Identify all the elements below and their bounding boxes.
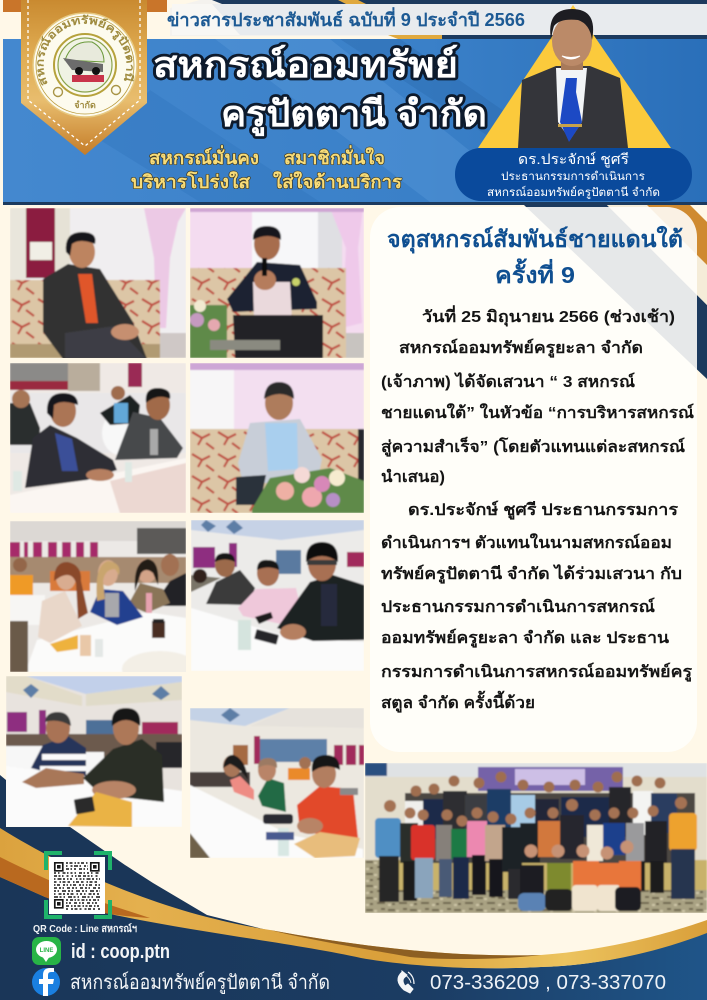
icon: phone — [398, 971, 414, 993]
photo: two men at table — [10, 363, 186, 513]
icon: facebook — [32, 968, 60, 996]
article body: สหกรณ์ออมทรัพย์ครูยะลา จำกัด — [399, 338, 643, 359]
logo: cooperative seal: จำกัด — [74, 100, 96, 110]
president name plate: ดร.ประจักษ์ ชูศรี — [518, 151, 630, 168]
line id: id : coop.ptn — [71, 941, 170, 963]
article body: (เจ้าภาพ) ได้จัดเสวนา “ 3 สหกรณ์ — [381, 372, 635, 391]
article body: ชายแดนใต้” ในหัวข้อ “การบริหารสหกรณ์ — [381, 403, 694, 422]
article heading: จตุสหกรณ์สัมพันธ์ชายแดนใต้ — [387, 225, 683, 254]
title: ครูปัตตานี จำกัด — [221, 93, 487, 137]
QR code — [46, 853, 110, 917]
photo: two men in front of hall — [6, 676, 182, 827]
photo: speaker with microphone — [190, 208, 364, 358]
left diagonal accent — [0, 775, 275, 932]
icon: LINE: LINE — [40, 948, 53, 954]
president name plate: ประธานกรรมการดำเนินการ — [501, 170, 645, 183]
president name plate — [455, 148, 692, 201]
article heading — [387, 225, 683, 288]
photo: three women at table — [10, 521, 186, 672]
article body — [381, 305, 694, 714]
article body: สตูล จำกัด ครั้งนี้ด้วย — [381, 690, 535, 714]
ribbon and logo — [3, 0, 167, 155]
title — [153, 44, 487, 137]
title: สหกรณ์ออมทรัพย์ — [153, 44, 458, 85]
header band — [167, 0, 707, 39]
motto — [131, 145, 402, 192]
footer swoosh — [0, 828, 707, 1000]
corner diagonals — [524, 205, 707, 379]
article body: นำเสนอ) — [381, 468, 445, 486]
QR caption: QR Code : Line สหกรณ์ฯ — [33, 923, 137, 935]
article body: ดำเนินการฯ ตัวแทนในนามสหกรณ์ออม — [381, 533, 672, 552]
panel: article — [370, 207, 697, 752]
photo: group portrait — [365, 763, 707, 913]
president name plate: สหกรณ์ออมทรัพย์ครูปัตตานี จำกัด — [487, 185, 660, 199]
article heading: ครั้งที่ 9 — [495, 258, 575, 288]
photo: three men at table — [191, 520, 364, 671]
phone numbers: 073-336209 , 073-337070 — [430, 972, 666, 994]
article body: ดร.ประจักษ์ ชูศรี ประธานกรรมการ — [408, 500, 678, 521]
motto: บริหารโปร่งใส — [131, 171, 251, 192]
president portrait — [478, 5, 671, 148]
article body: ออมทรัพย์ครูยะลา จำกัด และ ประธาน — [381, 628, 669, 649]
facebook name: สหกรณ์ออมทรัพย์ครูปัตตานี จำกัด — [70, 971, 330, 995]
blue header panel — [3, 39, 707, 205]
issue line: ข่าวสารประชาสัมพันธ์ ฉบับที่ 9 ประจำปี 2566 — [167, 7, 525, 30]
photo: row at long table — [190, 708, 364, 858]
photo: man in orange shirt on sofa — [10, 208, 186, 358]
motto: ใส่ใจด้านบริการ — [273, 171, 402, 192]
motto: สมาชิกมั่นใจ — [284, 145, 385, 168]
photo: man in grey jacket with flowers — [190, 363, 364, 513]
icon: LINE — [32, 937, 61, 965]
article body: วันที่ 25 มิถุนายน 2566 (ช่วงเช้า) — [422, 305, 675, 327]
article body: ทรัพย์ครูปัตตานี จำกัด ได้ร่วมเสวนา กับ — [381, 564, 682, 585]
article body: ประธานกรรมการดำเนินการสหกรณ์ — [381, 597, 655, 616]
motto: สหกรณ์มั่นคง — [149, 145, 259, 168]
logo: cooperative seal: สหกรณ์ออมทรัพย์ครูปัตตานี — [37, 14, 134, 86]
article body: กรรมการดำเนินการสหกรณ์ออมทรัพย์ครู — [381, 662, 692, 683]
article body: สู่ความสำเร็จ” (โดยตัวแทนแต่ละสหกรณ์ — [381, 435, 685, 458]
logo: cooperative seal — [32, 12, 138, 118]
